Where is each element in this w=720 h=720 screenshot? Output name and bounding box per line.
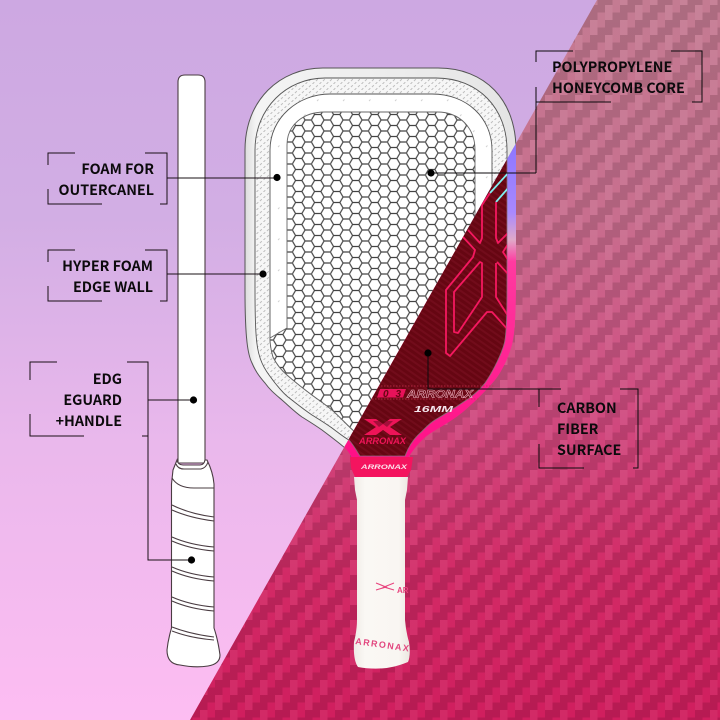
brand X logo — [364, 419, 402, 435]
callout: edgeguard and handle: +HANDLE — [56, 410, 122, 431]
callout: hyper foam edge wall: EDGE WALL — [73, 276, 153, 297]
callout: edgeguard and handle: EDG — [93, 368, 122, 389]
callout: foam for outercanel — [48, 153, 281, 204]
pink collar: ARRONAX — [360, 464, 408, 471]
hyper foam edge wall — [270, 94, 492, 470]
grip x mark — [376, 583, 394, 590]
model line: 03 ARRONAX: ARRONAX — [406, 388, 474, 400]
callout: edgeguard and handle — [30, 362, 197, 564]
callout: foam for outercanel: OUTERCANEL — [58, 179, 154, 200]
outer rim — [245, 68, 516, 458]
grip base text: ARRONAX — [355, 636, 410, 653]
thickness label: 16MM — [414, 405, 454, 414]
grip tape bands — [172, 505, 214, 640]
callout: edgeguard and handle: EGUARD — [63, 389, 122, 410]
callout: carbon fiber surface: CARBON — [557, 397, 617, 418]
model line: 03 ARRONAX — [372, 386, 494, 400]
neon X graphic — [446, 171, 510, 356]
callout: hyper foam edge wall: HYPER FOAM — [62, 255, 153, 276]
carbon face — [348, 158, 508, 456]
grip wrap — [167, 460, 220, 667]
callout: carbon fiber surface: SURFACE — [557, 439, 621, 460]
paddle: white cross-section side — [245, 68, 516, 470]
callout: polypropylene honeycomb core: POLYPROPYLENE — [552, 56, 672, 77]
pink edge guard — [344, 144, 516, 457]
callout: polypropylene honeycomb core: HONEYCOMB CORE — [552, 77, 685, 98]
grip collar lines — [172, 462, 214, 488]
model line: 03 ARRONAX: 03 — [383, 389, 401, 400]
callout: hyper foam edge wall — [48, 250, 267, 301]
callout: foam for outercanel: FOAM FOR — [81, 158, 154, 179]
background: carbon fiber panel — [190, 0, 720, 720]
foam outer canal band — [255, 78, 507, 440]
white grip — [354, 477, 410, 669]
handle shaft — [178, 75, 205, 463]
callout: carbon fiber surface: FIBER — [557, 418, 599, 439]
honeycomb core — [270, 114, 474, 430]
brand name: ARRONAX — [358, 436, 407, 446]
callout: carbon fiber surface — [424, 349, 638, 468]
pink collar — [350, 457, 413, 477]
white grip: AR — [397, 586, 409, 595]
callout: polypropylene honeycomb core — [427, 51, 702, 177]
left handle line drawing — [167, 75, 220, 667]
paddle: finished carbon side — [344, 144, 516, 669]
